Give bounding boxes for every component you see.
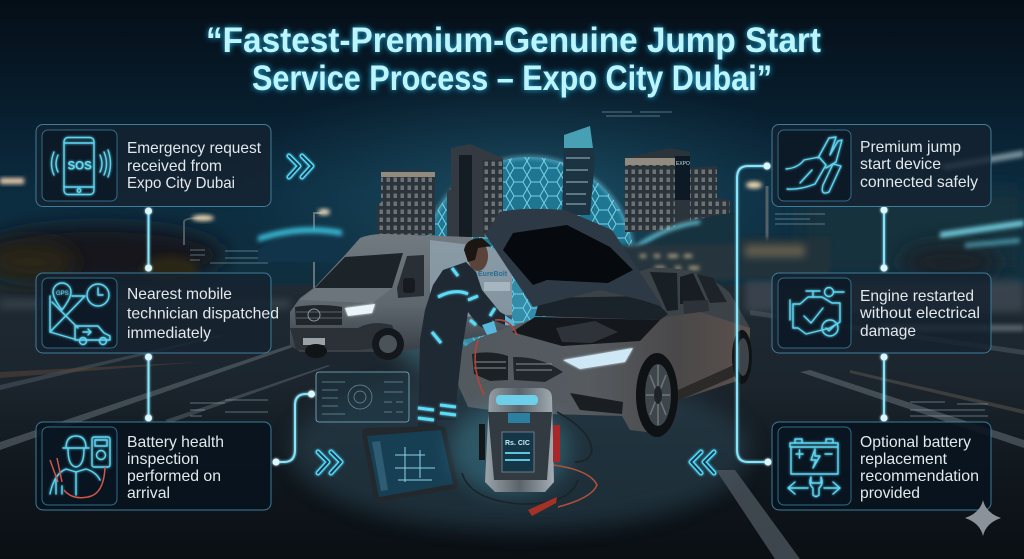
step 1 text: Emergency request xyxy=(127,140,262,157)
title xyxy=(206,21,821,98)
step 3 text: Battery health xyxy=(127,434,224,451)
icon: sparkle watermark xyxy=(965,500,1001,536)
panel: step 2 technician dispatched xyxy=(36,273,279,353)
city towers: EXPO xyxy=(676,161,690,167)
street lamps and distant lights xyxy=(184,182,830,290)
portable jump starter device: Rs. CIC xyxy=(505,440,530,447)
step 2 text xyxy=(127,286,279,342)
panel: step 1 emergency request xyxy=(36,124,271,206)
icon: technician with multimeter xyxy=(50,436,110,495)
hologram diagnostics panel xyxy=(316,372,409,422)
step 4 text: Premium jump xyxy=(860,139,961,156)
step 5 text: damage xyxy=(860,323,916,340)
open car bonnet xyxy=(485,209,663,307)
panel: step 4 device connected xyxy=(772,124,991,206)
portable jump starter device xyxy=(462,388,597,516)
icon: GPS map, clock and van: GPS xyxy=(56,291,69,297)
title: Service Process – Expo City Dubai” xyxy=(252,59,772,98)
city towers xyxy=(377,126,735,280)
step 6 text: replacement xyxy=(860,451,948,468)
panel: step 6 battery replacement xyxy=(772,422,991,510)
icon: SOS phone: SOS xyxy=(68,160,92,172)
panel: step 3 battery inspection xyxy=(36,422,271,510)
step 6 text: Optional battery xyxy=(860,434,971,451)
technician xyxy=(418,238,515,427)
service van xyxy=(290,234,512,360)
step 2 text: Nearest mobile xyxy=(127,286,232,303)
step 5 text: without electrical xyxy=(859,305,980,322)
step 3 text: performed on xyxy=(127,468,221,485)
connectors and arrows xyxy=(145,156,888,473)
stadium on left horizon xyxy=(258,227,342,262)
panel: step 5 engine restarted xyxy=(772,273,991,353)
step 4 text: connected safely xyxy=(860,174,978,191)
step 2 text: immediately xyxy=(127,325,211,342)
step 4 text: start device xyxy=(860,156,941,173)
step 1 text xyxy=(127,140,262,192)
step 3 text xyxy=(127,434,224,502)
title: “Fastest-Premium-Genuine Jump Start xyxy=(206,21,821,60)
jump cables to the car xyxy=(475,320,517,395)
step 5 text: Engine restarted xyxy=(860,288,974,305)
step 3 text: arrival xyxy=(127,485,170,502)
step 5 text xyxy=(859,288,980,340)
icon: hand holding clamp xyxy=(786,137,842,193)
step 6 text: recommendation xyxy=(860,468,979,485)
step 3 text: inspection xyxy=(127,451,199,468)
step 1 text: received from xyxy=(127,158,222,175)
step 4 text xyxy=(860,139,978,191)
step 1 text: Expo City Dubai xyxy=(127,175,235,192)
service van: EureBolt xyxy=(478,271,508,278)
icon: GPS map, clock and van xyxy=(50,283,110,344)
Expo dome xyxy=(424,157,634,367)
car xyxy=(455,268,752,437)
step 6 text xyxy=(860,434,979,502)
icon: red test leads xyxy=(50,458,105,498)
step 6 text: provided xyxy=(860,485,920,502)
diagnostic tablet xyxy=(362,426,458,502)
icon: engine with check and key xyxy=(790,288,844,336)
icon: battery with wrench and arrows xyxy=(788,439,840,496)
holographic data snippets xyxy=(190,112,988,416)
glow under jump starter xyxy=(450,405,570,495)
step 2 text: technician dispatched xyxy=(127,306,279,322)
glow behind vehicles xyxy=(380,255,610,385)
icon: SOS phone xyxy=(52,138,110,194)
